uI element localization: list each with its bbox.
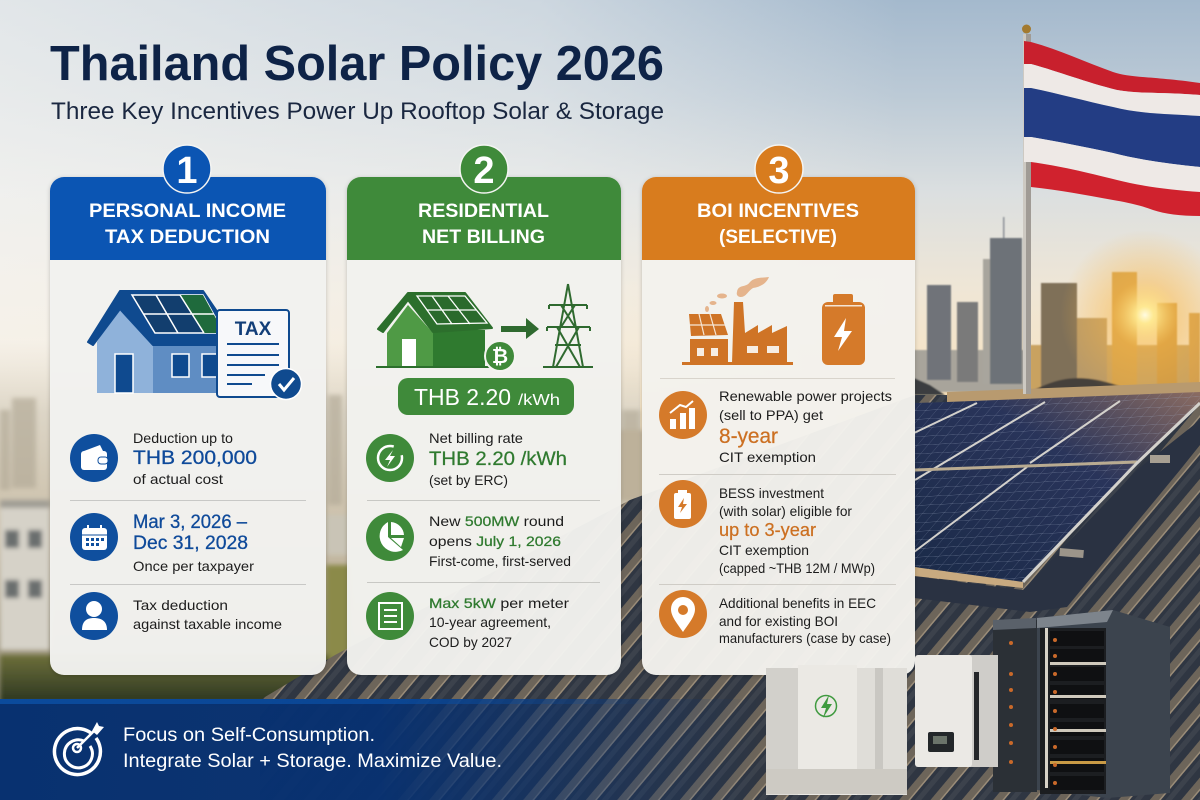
row: tax deduction note: against taxable income bbox=[133, 616, 282, 632]
battery rack bbox=[993, 610, 1170, 798]
heading: NET BILLING bbox=[422, 226, 545, 248]
row: renewable power projects: CIT exemption bbox=[719, 449, 816, 465]
row: net billing rate: THB 2.20 /kWh bbox=[429, 448, 567, 470]
icon: wallet bbox=[70, 434, 118, 482]
row: tax deduction note bbox=[70, 592, 282, 640]
row: meter limit: 10-year agreement, bbox=[429, 614, 551, 630]
row: eligibility dates: Dec 31, 2028 bbox=[133, 532, 248, 554]
row: BESS investment: (with solar) eligible for bbox=[719, 503, 852, 519]
row: deduction amount: of actual cost bbox=[133, 471, 223, 487]
inverter bbox=[915, 655, 998, 767]
row: meter limit: COD by 2027 bbox=[429, 634, 512, 650]
flagpole bbox=[1022, 24, 1031, 394]
icon: calendar bbox=[70, 513, 118, 561]
background: right skyline bbox=[914, 217, 1200, 400]
number badge 2: 2 bbox=[473, 150, 495, 192]
icon: house with tax document bbox=[88, 291, 302, 400]
rate pill bbox=[398, 378, 574, 415]
footer message: Integrate Solar + Storage. Maximize Value. bbox=[123, 750, 502, 772]
number badge 2 bbox=[460, 145, 508, 193]
row: eligibility dates bbox=[70, 511, 254, 574]
Thai flag on pole bbox=[1022, 24, 1200, 394]
icon: document bbox=[366, 592, 414, 640]
card header bbox=[50, 177, 326, 260]
arrow to grid bbox=[501, 318, 539, 339]
solar panels on roof bbox=[914, 382, 1200, 588]
row: renewable power projects: Renewable power projects bbox=[719, 388, 892, 404]
number badge 3 bbox=[755, 145, 803, 193]
icon: house with tax document: TAX bbox=[235, 319, 272, 340]
row: additional benefits: Additional benefits in EEC bbox=[719, 595, 876, 611]
heading: BOI INCENTIVES bbox=[697, 200, 859, 222]
white storage cabinet bbox=[766, 665, 907, 795]
title: Thailand Solar Policy 2026 bbox=[50, 37, 664, 91]
row: net billing rate: Net billing rate bbox=[429, 430, 523, 446]
footer banner bbox=[0, 699, 760, 800]
panel: residential net billing bbox=[347, 145, 621, 675]
background: left apartment building bbox=[0, 500, 50, 650]
row: renewable power projects bbox=[659, 388, 892, 465]
row: 500MW round: opens July 1, 2026 bbox=[429, 533, 561, 549]
rate pill: /kWh bbox=[518, 392, 560, 409]
row: 500MW round: First-come, first-served bbox=[429, 553, 571, 569]
row: BESS investment: up to 3-year bbox=[719, 520, 816, 540]
icon: target with arrow bbox=[54, 722, 104, 775]
row: BESS investment: BESS investment bbox=[719, 485, 824, 501]
number badge 3: 3 bbox=[768, 150, 790, 192]
row: eligibility dates: Once per taxpayer bbox=[133, 558, 254, 574]
row: eligibility dates: Mar 3, 2026 – bbox=[133, 511, 247, 533]
row: renewable power projects: 8-year bbox=[719, 425, 778, 448]
card header bbox=[642, 177, 915, 260]
row: additional benefits: manufacturers (case by case) bbox=[719, 630, 891, 646]
heading: PERSONAL INCOME bbox=[89, 200, 286, 222]
row: meter limit: Max 5kW per meter bbox=[429, 595, 569, 611]
row: deduction amount: Deduction up to bbox=[133, 430, 233, 446]
row: deduction amount: THB 200,000 bbox=[133, 447, 257, 469]
number badge 1: 1 bbox=[176, 150, 198, 192]
row: deduction amount bbox=[70, 430, 257, 487]
row: BESS investment: (capped ~THB 12M / MWp) bbox=[719, 560, 875, 576]
row: 500MW round: New 500MW round bbox=[429, 513, 564, 529]
heading: RESIDENTIAL bbox=[418, 200, 549, 222]
footer message bbox=[123, 724, 502, 772]
battery storage equipment bbox=[766, 610, 1170, 798]
icon: coin: ₿ bbox=[492, 344, 508, 368]
icon: person bbox=[70, 592, 118, 640]
rate pill: THB 2.20 bbox=[414, 384, 511, 410]
icon: transmission tower bbox=[543, 284, 593, 367]
row: net billing rate bbox=[366, 430, 567, 488]
panel: personal income tax deduction bbox=[50, 145, 326, 675]
heading: TAX DEDUCTION bbox=[105, 226, 270, 248]
factory smoke bbox=[737, 277, 769, 297]
icon: energy cycle bbox=[366, 434, 414, 482]
icon: coin bbox=[485, 341, 515, 371]
footer message: Focus on Self-Consumption. bbox=[123, 724, 375, 746]
background: metal roof bbox=[260, 395, 1200, 800]
panel: BOI incentives bbox=[642, 145, 915, 675]
icon: pie chart bbox=[366, 513, 414, 561]
row: net billing rate: (set by ERC) bbox=[429, 472, 508, 488]
icon: factory with solar roof bbox=[682, 277, 793, 365]
background: hazy left city and trees bbox=[0, 340, 643, 705]
heading: (SELECTIVE) bbox=[719, 226, 837, 248]
card header bbox=[347, 177, 621, 260]
row: renewable power projects: (sell to PPA) get bbox=[719, 407, 823, 423]
icon: battery bbox=[822, 294, 865, 365]
number badge 1 bbox=[163, 145, 211, 193]
row: BESS investment bbox=[659, 480, 875, 576]
heading bbox=[418, 200, 549, 248]
icon: battery badge bbox=[659, 480, 707, 528]
icon: green charge emblem bbox=[816, 695, 836, 718]
icon: sun glare bbox=[1060, 230, 1200, 400]
row: tax deduction note: Tax deduction bbox=[133, 597, 228, 613]
row: 500MW round bbox=[366, 513, 571, 569]
row: additional benefits bbox=[659, 590, 891, 646]
row: additional benefits: and for existing BOI bbox=[719, 613, 838, 629]
heading bbox=[89, 200, 286, 248]
icon: house feeding grid tower bbox=[376, 284, 593, 371]
row: meter limit bbox=[366, 592, 569, 650]
icon: growth chart bbox=[659, 391, 707, 439]
heading bbox=[697, 200, 859, 248]
row: BESS investment: CIT exemption bbox=[719, 542, 809, 558]
subtitle: Three Key Incentives Power Up Rooftop Solar & Storage bbox=[51, 98, 664, 125]
icon: location pin bbox=[659, 590, 707, 638]
